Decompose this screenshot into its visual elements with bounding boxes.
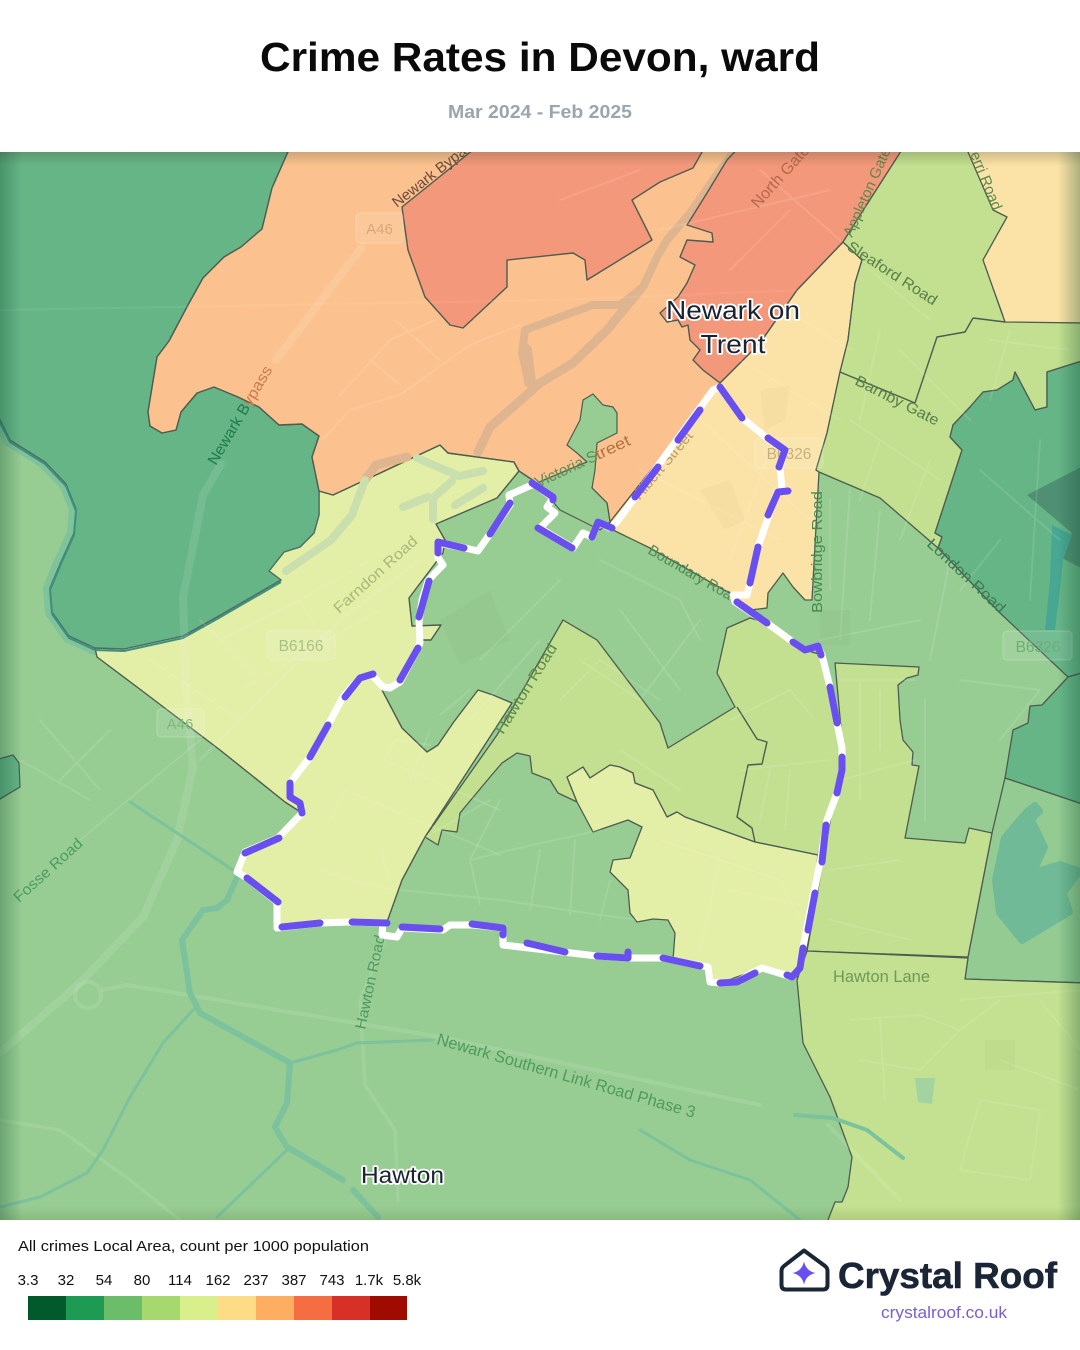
legend labels: 237: [243, 1272, 269, 1289]
area: orange town centre: [148, 145, 760, 522]
map edge vignette: [0, 152, 1080, 1220]
label: Albert Street: Albert Street: [630, 427, 697, 503]
ward boundary: purple dashes: [245, 387, 842, 983]
logo wordmark: Crystal Roof: [838, 1255, 1058, 1296]
legend labels: 162: [205, 1272, 231, 1289]
building patches: [440, 385, 1015, 1070]
label: Sleaford Road: Sleaford Road: [844, 238, 940, 309]
legend labels: 114: [168, 1272, 192, 1289]
label: Hawton Lane: Hawton Lane: [833, 968, 930, 986]
area: lime east of ward: [807, 663, 992, 957]
road shield: B6326 centre: B6326: [767, 446, 811, 463]
area: cream central: [610, 242, 862, 610]
label: Fosse Road: Fosse Road: [10, 835, 86, 906]
label: Hawton Road north: Hawton Road: [492, 641, 561, 737]
legend title: All crimes Local Area, count per 1000 population: [18, 1239, 369, 1255]
area: west yellow: [95, 445, 519, 928]
water: lake: [995, 805, 1080, 941]
map base: green area: [0, 284, 1067, 1220]
road shield: B6326 centre: [755, 438, 823, 468]
road shield: A46 north: [356, 213, 403, 243]
river edge along western area: [0, 413, 281, 651]
label: Appleton Gate: Appleton Gate: [840, 145, 895, 240]
road shield: B6326 east: [1003, 631, 1072, 660]
road shield: A46 south: A46: [167, 716, 193, 733]
label: Victoria Street, green part: Victoria S: [533, 448, 600, 492]
area boundaries inside ward: [737, 707, 767, 842]
water: east teal channel: [1045, 525, 1072, 630]
place label: Newark on Trent: Trent: [700, 329, 766, 359]
label: Newark Bypass south, green part: Newark B: [205, 401, 254, 468]
subtitle: date range: Mar 2024 - Feb 2025: [448, 101, 632, 122]
road shield: B6166: B6166: [279, 638, 323, 655]
main roads: [0, 247, 900, 1220]
area: green with lake: [965, 778, 1080, 983]
title: Crime Rates in Devon, ward: [260, 34, 820, 80]
label: Hawton Road south: Hawton Road: [352, 933, 389, 1031]
area: lime north-east: [816, 145, 1080, 548]
road shield: A46 north: A46: [366, 221, 393, 238]
road shield: B6326 east: B6326: [1016, 639, 1060, 656]
legend colour scale: [28, 1296, 407, 1320]
label: Newark Bypass south, orange part: ypass: [239, 363, 276, 410]
small dark green patch at west edge: [0, 755, 20, 802]
legend labels: 54: [96, 1272, 112, 1289]
legend labels: 3.3: [18, 1272, 38, 1289]
road shield: B6166: [267, 631, 335, 660]
label: Newark Southern Link Road Phase 3: Newark Southern Link Road Phase 3: [435, 1031, 697, 1122]
river halo around western area: [0, 426, 96, 655]
place label: Newark on Trent: [666, 295, 800, 359]
label: North Gate: North Gate: [748, 142, 813, 212]
label: top edge road: erri Road: [966, 149, 1005, 213]
label: Farndon Road: Farndon Road: [330, 533, 421, 617]
area: green enclave at Victoria Street: [537, 394, 617, 530]
label: Bowbridge Road: Bowbridge Road: [810, 491, 826, 613]
website link: crystalroof.co.uk: [881, 1304, 1008, 1322]
pond south-east: [915, 1078, 935, 1104]
label: Newark Bypass north: Newark Bypass: [389, 134, 482, 211]
ward boundary: white line: [237, 387, 842, 983]
legend labels: 387: [281, 1272, 307, 1289]
area: dark green south-east: [1005, 672, 1080, 805]
streams: [0, 802, 903, 1220]
place label: Hawton: Hawton: [361, 1162, 444, 1188]
area: cream north-east corner: [965, 145, 1080, 323]
legend labels: 743: [319, 1272, 345, 1289]
label: Barnby Gate: Barnby Gate: [852, 372, 942, 429]
streets: [20, 170, 1080, 1180]
logo icon: house with star: [782, 1250, 828, 1290]
label: Victoria Street, orange part: treet: [593, 432, 634, 464]
area: darker patch at east edge: [1027, 465, 1080, 570]
area boundaries in lime north-east: [840, 318, 1005, 403]
legend labels: [18, 1272, 422, 1289]
area: lime inside ward: [425, 618, 842, 855]
legend labels: 1.7k: [355, 1272, 384, 1289]
label: London Road: London Road: [923, 535, 1009, 617]
rivers through orange area: [365, 150, 735, 480]
area: red north-west: [402, 145, 706, 328]
legend labels: 80: [134, 1272, 150, 1289]
legend labels: 5.8k: [393, 1272, 422, 1289]
legend labels: 32: [58, 1272, 74, 1289]
area: west dark green: [0, 145, 319, 649]
area: red north-east: [660, 145, 905, 383]
area: light yellow inside ward: [567, 765, 818, 983]
road shield: A46 south: [157, 709, 204, 737]
label: Boundary Road: Boundary Road: [645, 542, 743, 608]
area: dark green east: [935, 360, 1080, 677]
road labels: [10, 134, 1072, 1122]
area: lime south-east: [797, 951, 1080, 1225]
place label: Newark on Trent: Newark on: [666, 295, 800, 325]
river through yellow area: [286, 458, 483, 571]
